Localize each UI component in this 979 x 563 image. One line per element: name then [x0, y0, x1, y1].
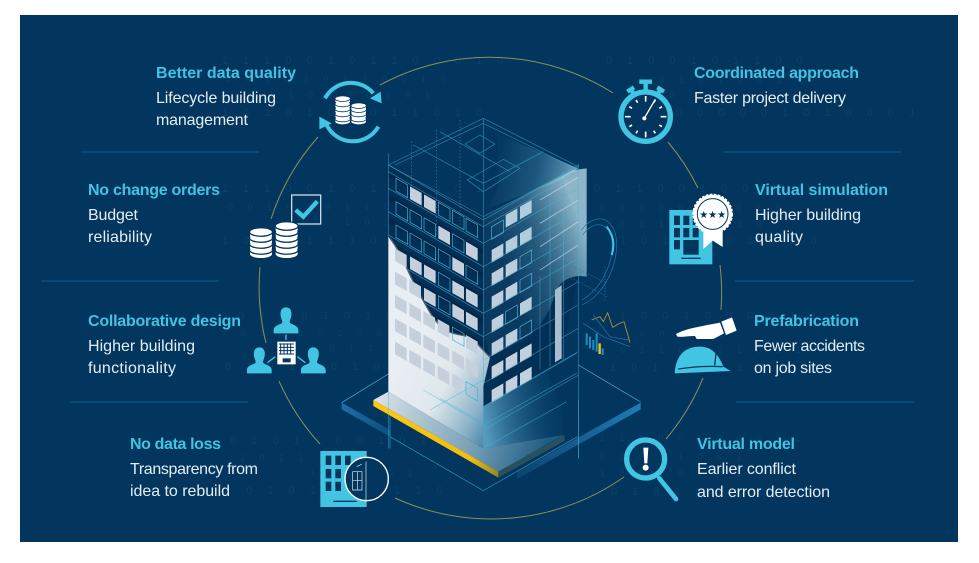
- binary digit background: 1 0 1 0 1 1 1 0 1 0 1 0: [222, 235, 467, 247]
- binary digit background: 1 0 1 0 1 0 1 0 1 0: [620, 235, 823, 247]
- binary digit background: 0 1 0 1 0 1 0 0: [240, 328, 388, 338]
- binary digit background: 1 0 0 1 0 1 0 1: [600, 468, 748, 478]
- block: no change orders: reliability: [88, 229, 152, 246]
- left face windows: [395, 186, 478, 393]
- binary digit background: 1 0 1 1 1 0: [240, 453, 349, 463]
- icon: building with quality badge: [669, 195, 732, 264]
- holographic gauge: [540, 219, 617, 305]
- facade edge: [390, 238, 490, 357]
- dividers: [41, 152, 914, 402]
- icon: building with quality badge: ★★★: [699, 210, 726, 221]
- block: better data quality: [156, 65, 296, 129]
- block: collaborative design: Higher building: [88, 338, 195, 355]
- block: virtual model: Earlier conflict: [697, 461, 797, 478]
- block: prefabrication: Prefabrication: [754, 313, 859, 330]
- block: coordinated approach: Faster project delivery: [694, 90, 846, 107]
- binary digit background: 0 0 1 0 1: [640, 329, 729, 339]
- dark floor bands on left face: [388, 173, 483, 345]
- binary digit background: 0 1 1 0 1 0 1 0 0 1: [238, 310, 441, 322]
- right face windows: [492, 200, 532, 403]
- block: no data loss: No data loss: [130, 436, 221, 453]
- binary digit background: 0 1 0 1 1 0 1 0 1 1 0 1: [225, 361, 470, 373]
- block: no change orders: [88, 182, 220, 246]
- block: collaborative design: functionality: [88, 360, 176, 377]
- binary digit background: 1 0 1 1 1 0 1: [310, 343, 438, 353]
- icon: building under magnifying circle: [320, 451, 388, 507]
- block: virtual simulation: Virtual simulation: [755, 182, 888, 199]
- block: virtual simulation: quality: [755, 229, 803, 246]
- binary digit background: 1 1 1 0 0 1 0 1 1 0 0 0 1: [222, 183, 488, 195]
- concrete slab: [373, 392, 565, 478]
- binary digit background: 0 1 1 0 0 1 0 0 0 1 1: [594, 183, 818, 195]
- binary digit background: 1 0 1 1 0 1 0 0 1 0 1: [230, 90, 436, 100]
- block: better data quality: Lifecycle building: [156, 90, 276, 107]
- dark building core: [388, 165, 578, 407]
- icon: coins with checkbox: [249, 195, 321, 258]
- block: no data loss: Transparency from: [130, 461, 258, 478]
- left face window outlines: [396, 178, 478, 401]
- ring connecting the benefits: [259, 57, 722, 519]
- binary digit background: 1 0 1 1: [345, 217, 415, 227]
- block: virtual simulation: Higher building: [755, 207, 861, 224]
- icon: hand over hard hat: [675, 317, 737, 373]
- binary digit background: 1 0 1 1 0 1: [310, 468, 419, 478]
- platform: [342, 365, 641, 491]
- binary digit background: 1 0 1 0 1 0 1 0 1 0: [590, 486, 793, 498]
- binary digit background: 0 0 1 0 1 0 1 1 0 0: [228, 202, 415, 212]
- block: virtual model: [697, 436, 830, 501]
- binary digit background: 0 1 0 0 1 0 1 1 0 0: [606, 55, 809, 67]
- block: prefabrication: Fewer accidents: [754, 338, 865, 355]
- right face window outlines: [492, 220, 532, 339]
- binary digit background: 1 0 0 1 0 0 0 0 1 1: [620, 310, 823, 322]
- binary digit background: 1 0 0 0 0 0 1 0 1 0 0 0 1: [655, 107, 921, 119]
- icon: stopwatch: [621, 82, 670, 141]
- central building illustration: [342, 118, 641, 491]
- binary digit background: 0 0 1 0 1 0 1 1 0 0 1 0: [226, 74, 452, 84]
- holographic chart: [583, 313, 630, 355]
- white facade: [388, 237, 490, 448]
- block: prefabrication: [754, 313, 865, 377]
- binary digit background: 0 0 1 0 1 1: [650, 90, 759, 100]
- block: no change orders: Budget: [88, 207, 139, 224]
- icon: data cycle with coins: [319, 83, 382, 141]
- block: virtual model: Virtual model: [697, 436, 795, 453]
- binary digit background: 1 0 1 0 1 0 1 0 1 0: [610, 362, 813, 374]
- wireframe overlay: [388, 118, 578, 458]
- binary digit background: 0 0 0 0 0 1 0 0 1 0: [600, 203, 787, 213]
- block: collaborative design: Collaborative design: [88, 313, 241, 330]
- block: collaborative design: [88, 313, 241, 377]
- binary digit background: 1 0 1 0 1 0 1 0 1 1 0: [225, 485, 449, 497]
- block: no data loss: idea to rebuild: [130, 483, 230, 500]
- lower right facade: [483, 370, 563, 448]
- binary digit background: 1 0 1 0 1 0 1 0 1 1 0 1 0: [222, 107, 488, 119]
- block: better data quality: Better data quality: [156, 65, 296, 82]
- translucent right wall: [483, 168, 587, 357]
- binary digit background: 0 1 0 1 1 0 0 1 0 1 0 0: [230, 435, 475, 447]
- block: no data loss: [130, 436, 258, 500]
- icon: magnifier with exclamation mark: [627, 440, 676, 499]
- binary digit background: 0 1 1 0 1 0 0 1: [640, 75, 788, 85]
- block: coordinated approach: Coordinated approach: [694, 65, 859, 82]
- binary digit background: 0 1 1 0 1 0 1 0 1 1: [620, 345, 807, 355]
- translucent roof shell: [483, 133, 578, 210]
- binary digit background: 1 1 1 0 0 1 0 1 1 0 0 0 1 0: [222, 55, 509, 67]
- binary digit background: 0 1 1 0 1 0 1 0: [620, 219, 768, 229]
- block: coordinated approach: [694, 65, 859, 107]
- binary digit background: [222, 55, 921, 498]
- structural column: [555, 285, 562, 362]
- icon: collaborating people around building: [247, 307, 326, 373]
- block: no change orders: No change orders: [88, 182, 220, 199]
- binary digit background: 0 1 0 1 1 0 0 1: [600, 452, 748, 462]
- block: prefabrication: on job sites: [754, 360, 832, 377]
- block: virtual simulation: [755, 182, 888, 246]
- block: better data quality: management: [156, 112, 249, 129]
- block: virtual model: and error detection: [697, 484, 830, 501]
- left wireframe floors: [388, 165, 483, 360]
- binary digit background: 1 1 1 0 0 1 0 0 0 1 1: [600, 433, 806, 443]
